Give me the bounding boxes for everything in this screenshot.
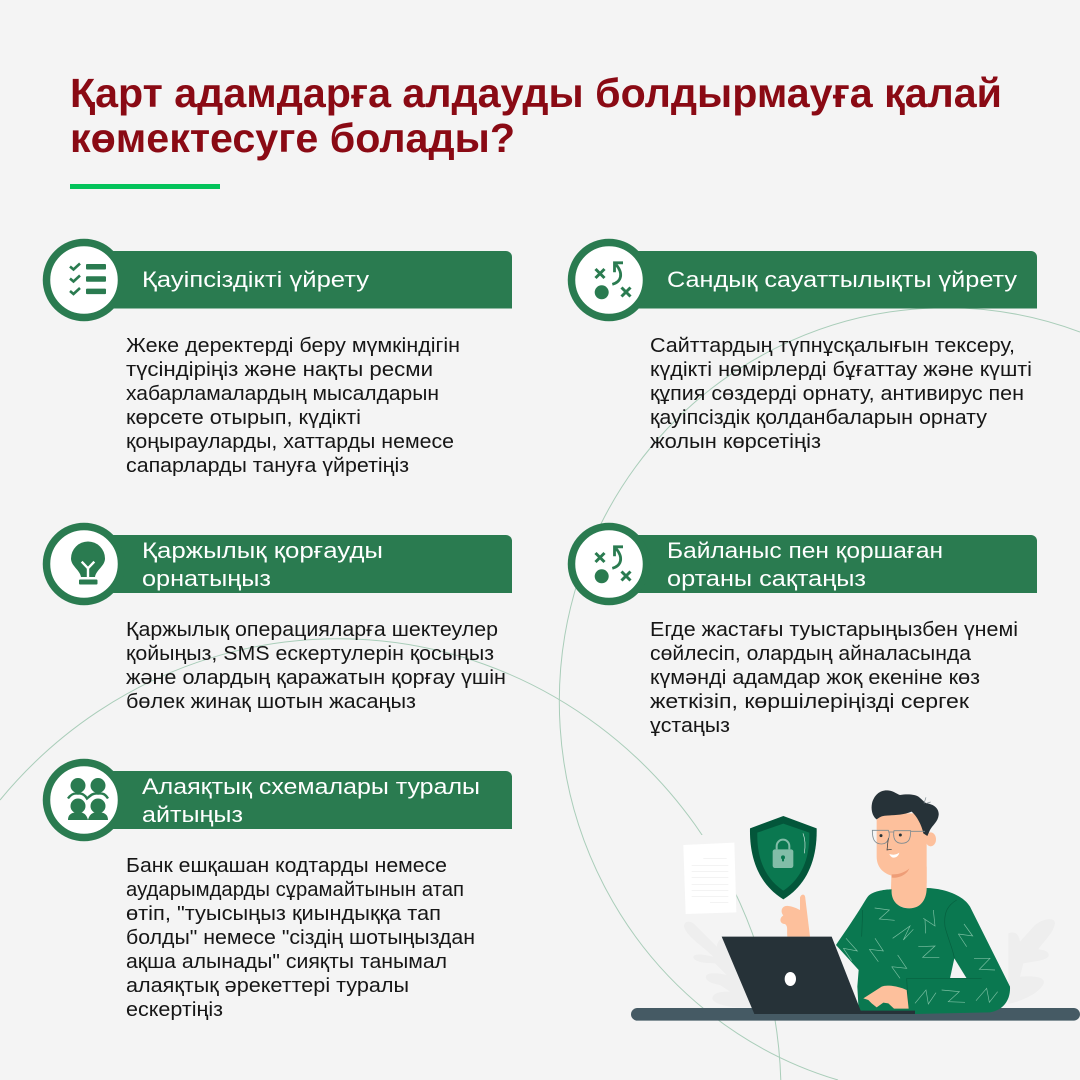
body text: Сайттардың түпнұсқалығын тексеру, (650, 335, 1015, 357)
body text: күдікті нөмірлерді бұғаттау және күшті (650, 359, 1032, 381)
title: Қарт адамдарға алдауды болдырмауға қалай (70, 70, 1002, 116)
table (631, 1008, 1080, 1021)
body text (126, 855, 475, 1021)
body text: хабарламалардың мысалдарын (126, 383, 439, 405)
body text: Жеке деректерді беру мүмкіндігін (126, 335, 460, 357)
body text (650, 619, 1018, 737)
body text: қауіпсіздік қолданбаларын орнату (650, 407, 987, 429)
body text: жолын көрсетіңіз (650, 431, 821, 453)
typing hand (863, 986, 909, 1009)
heading bar (572, 242, 1037, 318)
heading bar: айтыңыз (142, 802, 243, 827)
body text: аударымдарды сұрамайтынын атап (126, 879, 464, 901)
ear (925, 832, 936, 846)
body text: өтіп, "туысыңыз қиындыққа тап (126, 903, 441, 925)
body text: көрсете отырып, күдікті (126, 407, 361, 429)
heading bar: Байланыс пен қоршаған (667, 538, 943, 563)
body text: қоңырауларды, хаттарды немесе (126, 431, 454, 453)
icon: strategy (595, 547, 630, 583)
body text (650, 335, 1032, 453)
heading bar (46, 762, 512, 838)
sweater (836, 888, 1010, 1014)
pointing hand (780, 895, 810, 937)
face (877, 813, 927, 883)
illustration: man at laptop with security shield (631, 790, 1080, 1021)
body text: алаяқтық әрекеттері туралы (126, 975, 409, 997)
icon: strategy (595, 263, 630, 299)
body text: Қаржылық операцияларға шектеулер (126, 619, 498, 641)
body text: сөйлесіп, олардың айналасында (650, 643, 972, 665)
title (70, 70, 1002, 161)
body text: ескертіңіз (126, 999, 223, 1021)
laptop (722, 937, 915, 1014)
panel: staying in touch (572, 526, 1037, 737)
body text: құпия сөздерді орнату, антивирус пен (650, 383, 1024, 405)
icon: people (68, 778, 108, 820)
sweater pattern (843, 908, 998, 1004)
heading bar (46, 526, 512, 602)
body text: Егде жастағы туыстарыңызбен үнемі (650, 619, 1018, 641)
body text: ақша алынады" сияқты танымал (126, 951, 447, 973)
body text (126, 619, 506, 713)
body text: түсіндіріңіз және нақты ресми (126, 359, 433, 381)
panel: fraud schemes (46, 762, 512, 1021)
body text: Банк ешқашан кодтарды немесе (126, 855, 447, 877)
body text: бөлек жинақ шотын жасаңыз (126, 691, 416, 713)
heading bar: Сандық сауаттылықты үйрету (667, 267, 1017, 292)
body text: ұстаңыз (650, 715, 730, 737)
chin shadow (892, 868, 909, 878)
hair (872, 790, 939, 836)
panel: financial protection (46, 526, 512, 713)
right plant (1008, 919, 1055, 1004)
panel: digital literacy (572, 242, 1037, 453)
body text: қойыңыз, SMS ескертулерін қосыңыз (126, 643, 494, 665)
heading bar (572, 526, 1037, 602)
person (836, 790, 1010, 1014)
paper (677, 835, 736, 914)
body text: сапарларды тануға үйретіңіз (126, 455, 409, 477)
left plant (684, 922, 752, 1008)
body text: жеткізіп, көршілеріңізді сергек (650, 691, 969, 713)
neck (891, 867, 930, 909)
title: көмектесуге болады? (70, 115, 515, 161)
shield (750, 816, 817, 899)
glasses (872, 830, 925, 844)
body text: күмәнді адамдар жоқ екеніне көз (650, 667, 980, 689)
panel: safety teaching (46, 242, 512, 477)
body text: және олардың қаражатын қорғау үшін (126, 667, 506, 689)
heading bar: Қауіпсіздікті үйрету (142, 267, 369, 292)
body text (126, 335, 460, 477)
heading bar: ортаны сақтаңыз (667, 566, 866, 591)
icon: light bulb (71, 542, 105, 584)
heading bar: орнатыңыз (142, 566, 271, 591)
heading bar: Қаржылық қорғауды (142, 538, 383, 563)
eyes, nose and smile (879, 833, 902, 858)
heading bar: Алаяқтық схемалары туралы (142, 774, 480, 799)
title underline (70, 184, 220, 189)
head (872, 790, 939, 883)
icon: checklist (70, 264, 106, 294)
body text: болды" немесе "сіздің шотыңыздан (126, 927, 475, 949)
heading bar (46, 242, 512, 318)
